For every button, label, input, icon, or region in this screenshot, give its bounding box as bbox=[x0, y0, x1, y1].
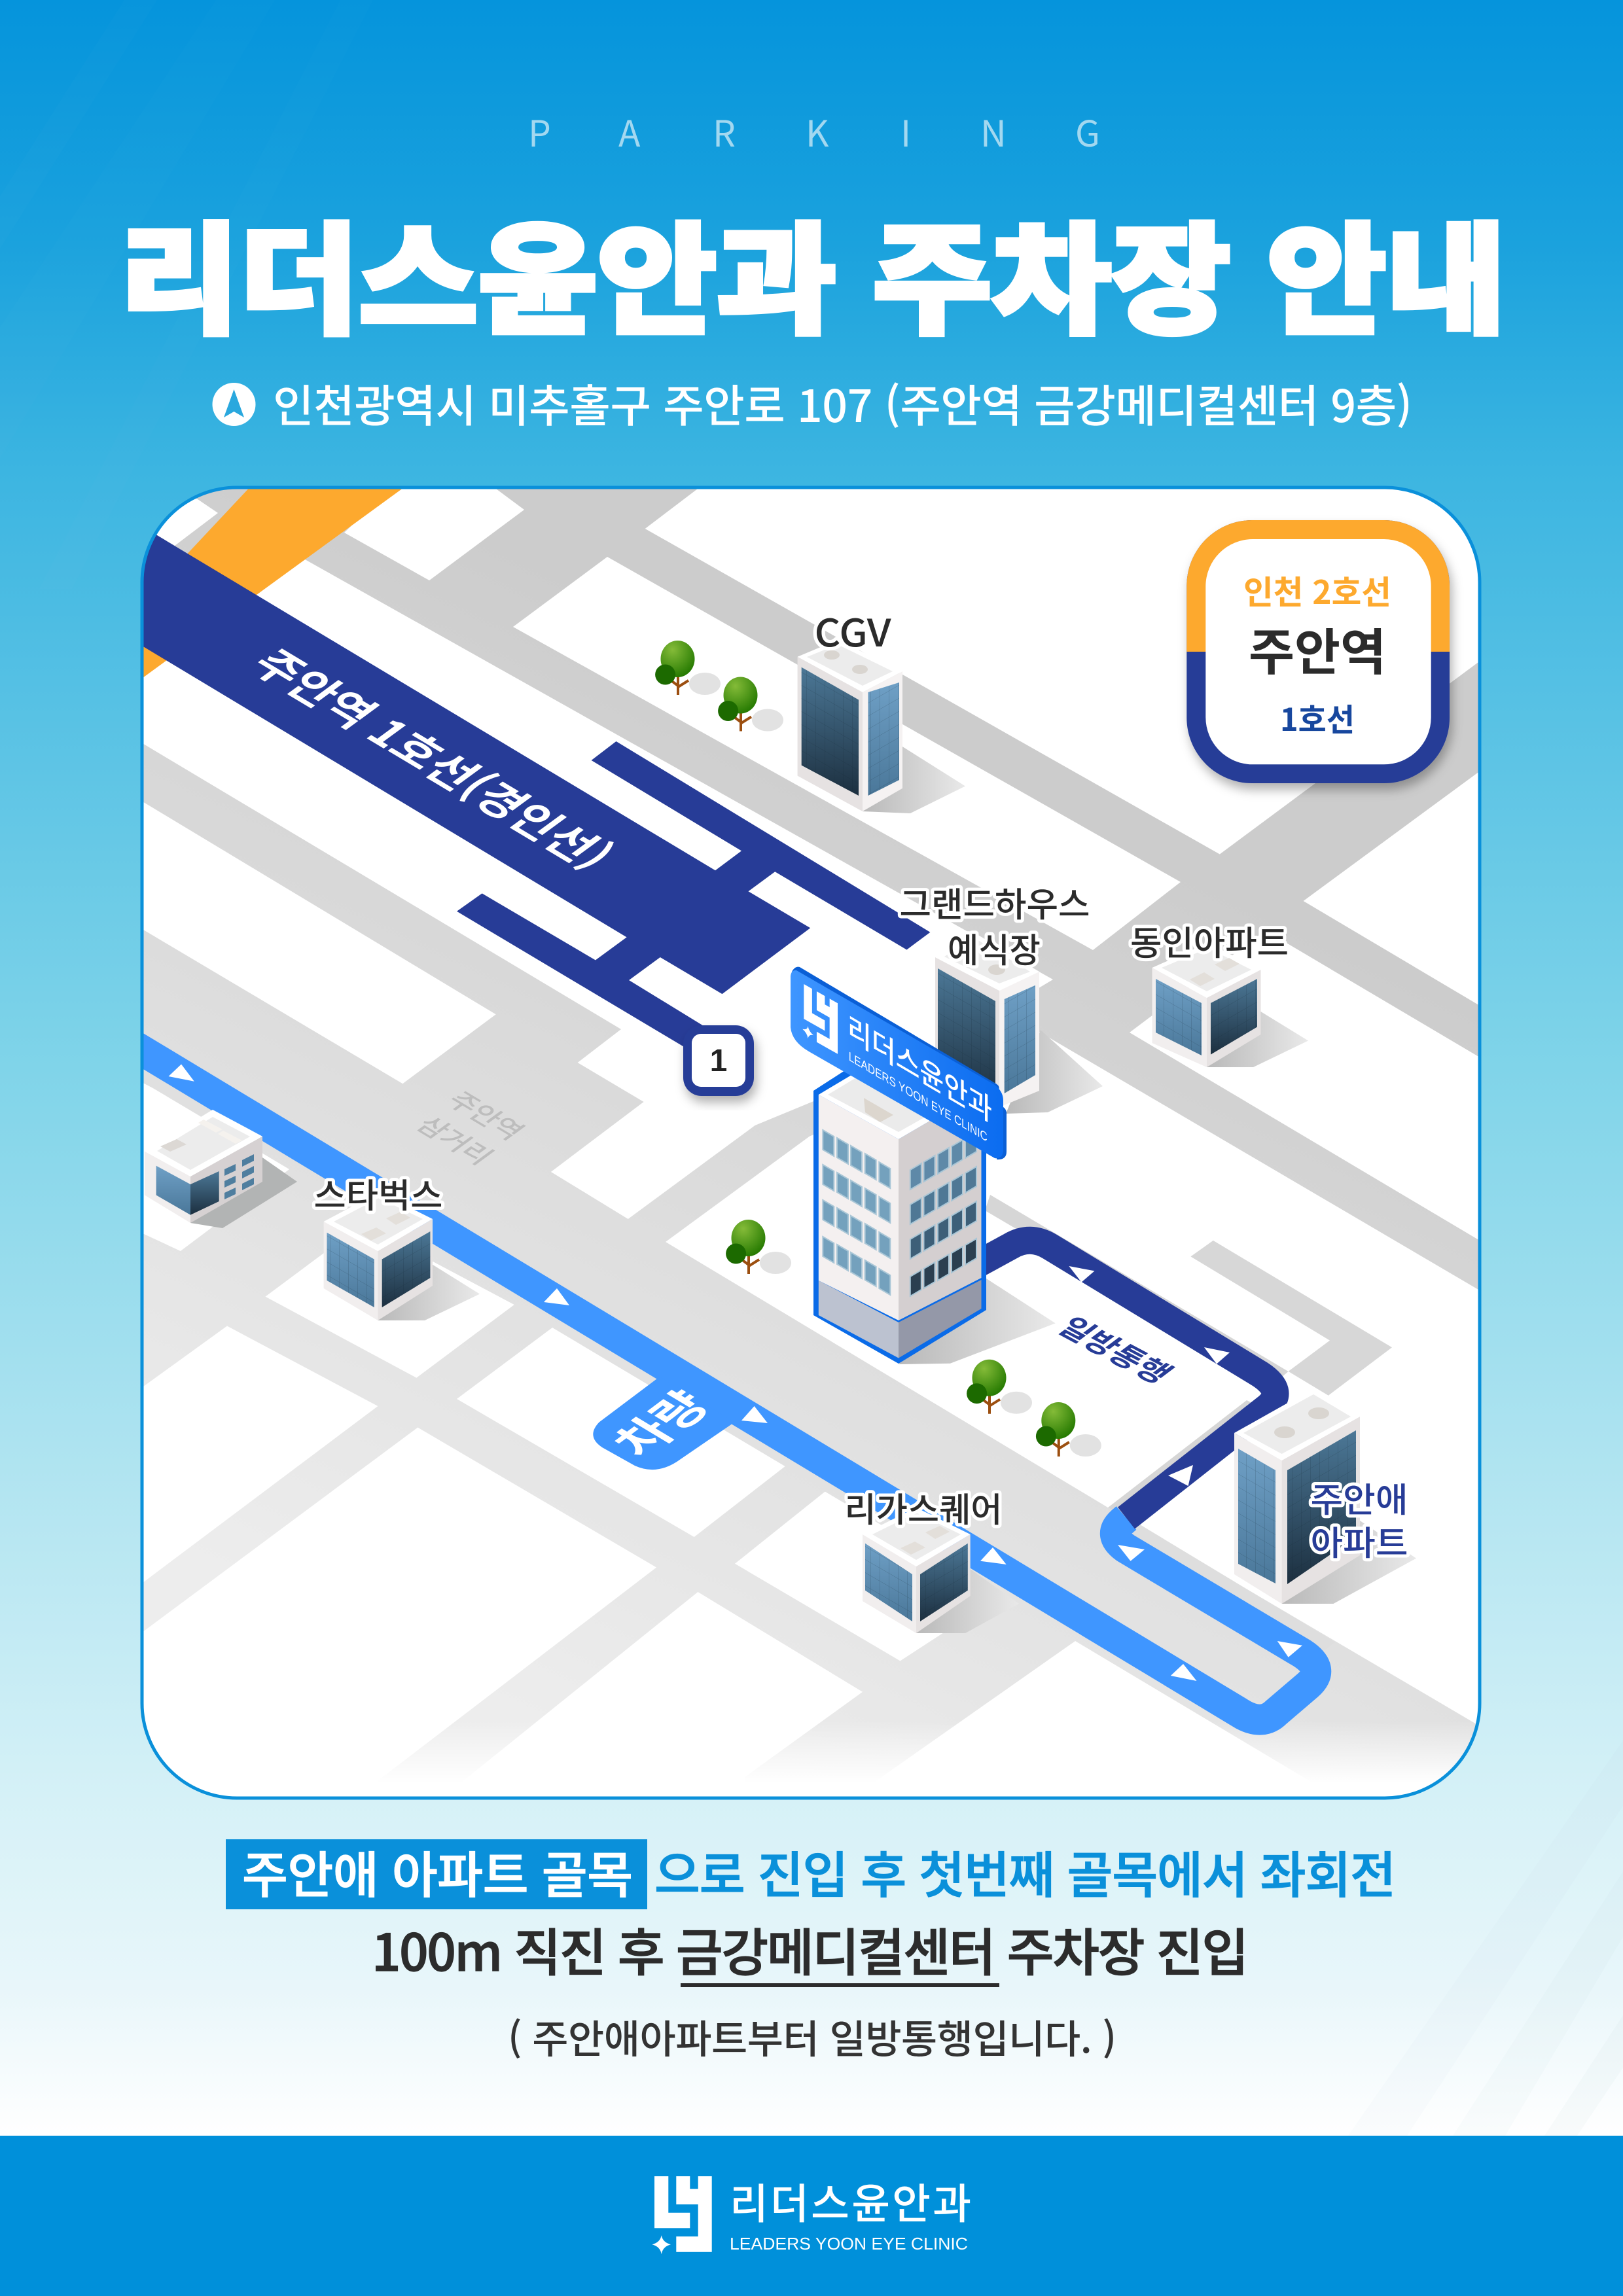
labels: 스타벅스 bbox=[314, 1169, 442, 1218]
intersection label: 주안역 bbox=[438, 1084, 535, 1146]
address line bbox=[212, 370, 1412, 435]
sign logo bbox=[802, 983, 838, 1055]
bottom fade of roads bbox=[373, 1739, 1471, 1797]
building: Juanae apartment bbox=[1234, 1388, 1416, 1604]
band label: 주안역 1호선(경인선) bbox=[238, 637, 632, 880]
clinic windows, right face bbox=[910, 1132, 976, 1296]
footer bar bbox=[0, 2136, 1623, 2296]
line 2 orange band bbox=[144, 489, 402, 677]
icon: location arrow bbox=[212, 383, 255, 426]
building: Grand House bbox=[935, 932, 1103, 1114]
station sign bbox=[1186, 520, 1450, 783]
footer logo bbox=[652, 2171, 971, 2254]
footer logo: 리더스윤안과 bbox=[730, 2171, 971, 2231]
address text: 인천광역시 미추홀구 주안로 107 (주안역 금강메디컬센터 9층) bbox=[273, 370, 1412, 435]
labels: 동인아파트 bbox=[1130, 916, 1289, 965]
clinic sign bbox=[791, 967, 1007, 1159]
note line: ( 주안애아파트부터 일방통행입니다. ) bbox=[508, 2008, 1116, 2065]
station sign: 1호선 bbox=[1280, 694, 1355, 740]
labels: 리가스퀘어 bbox=[844, 1483, 1003, 1532]
station sign: 주안역 bbox=[1249, 612, 1386, 684]
building: low block left bbox=[145, 1110, 297, 1228]
map artwork clipped to panel bbox=[144, 489, 1478, 1767]
gray parking lane bbox=[1190, 1241, 1392, 1396]
directions text block bbox=[226, 1835, 1396, 2065]
panel: map bbox=[65, 458, 1505, 1812]
trees bbox=[655, 641, 1101, 1457]
building: CGV bbox=[798, 640, 965, 813]
label pill: car: 차량 bbox=[594, 1377, 724, 1467]
building: Regal Square bbox=[863, 1508, 1019, 1633]
title: 리더스윤안과 주차장 안내 bbox=[120, 184, 1506, 358]
building: Dongin apartment bbox=[1152, 943, 1308, 1067]
footer logo: LEADERS YOON EYE CLINIC bbox=[730, 2234, 968, 2253]
direction line 2: 100m 직진 후 금강메디컬센터 주차장 진입 bbox=[372, 1913, 1249, 1986]
intersection label bbox=[418, 1091, 526, 1166]
intersection label: 삼거리 bbox=[408, 1108, 505, 1171]
route arrows bbox=[169, 1064, 1302, 1681]
eyebrow: PARKING: PARKING bbox=[528, 105, 1100, 157]
exit 1 badge: 1 bbox=[710, 1044, 727, 1078]
highlight: apartment alley: 주안애 아파트 골목 bbox=[242, 1835, 633, 1907]
sign name: 리더스윤안과 bbox=[847, 1002, 992, 1131]
building: clinic (main) bbox=[813, 1047, 1056, 1364]
sign english: LEADERS YOON EYE CLINIC bbox=[849, 1048, 988, 1144]
white city blocks bbox=[144, 489, 1478, 1764]
labels: 주안애 bbox=[1310, 1473, 1408, 1522]
panel border bbox=[142, 487, 1480, 1798]
station sign: 인천 2호선 bbox=[1243, 567, 1391, 614]
narrow road margin along one-way route bbox=[985, 1195, 1289, 1382]
labels: 예식장 bbox=[948, 923, 1041, 972]
one-way route: navy bbox=[975, 1241, 1275, 1518]
labels: 그랜드하우스 bbox=[899, 877, 1090, 927]
direction line 1: 으로 진입 후 첫번째 골목에서 좌회전 bbox=[654, 1835, 1396, 1907]
exit 1 badge bbox=[683, 1025, 754, 1096]
labels bbox=[314, 603, 1408, 1565]
building: Starbucks bbox=[324, 1192, 480, 1320]
labels: 아파트 bbox=[1310, 1516, 1408, 1565]
road base bbox=[131, 478, 1492, 1812]
car route: bright blue bbox=[105, 1028, 1316, 1720]
label: one-way: 일방통행 bbox=[1048, 1308, 1186, 1390]
clinic windows, left face bbox=[823, 1130, 890, 1295]
line 1 navy station band bbox=[144, 535, 931, 1047]
labels: CGV bbox=[814, 603, 891, 658]
